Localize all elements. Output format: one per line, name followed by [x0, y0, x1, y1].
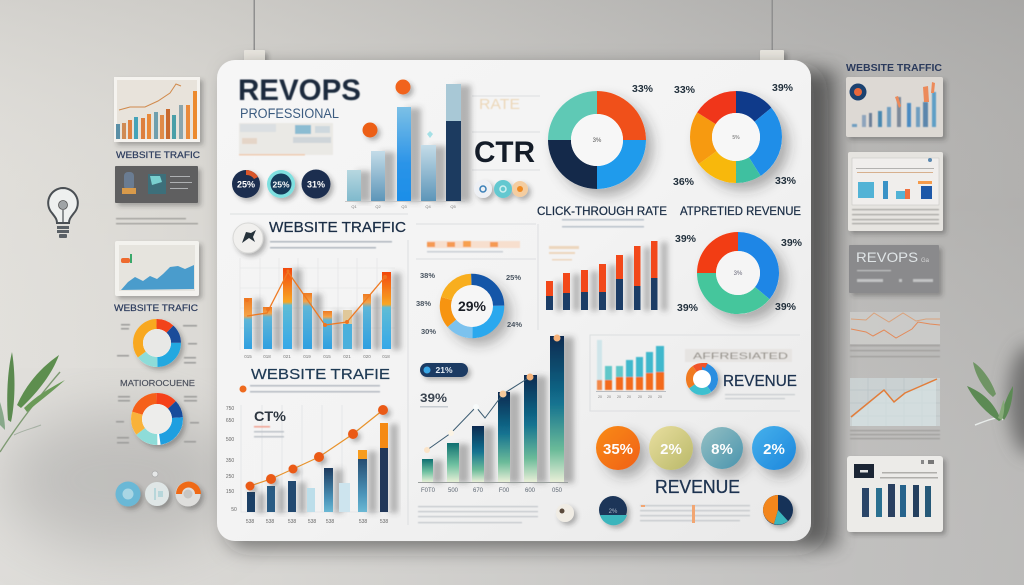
- mini bar chart: box: 20: [627, 395, 631, 399]
- gradient bar chart with trend line: 500: [448, 488, 459, 494]
- label: revenue small: [723, 373, 797, 399]
- panel dividers: [230, 96, 800, 525]
- combo chart: line and bars: 750: [226, 406, 234, 412]
- combo chart: line and bars: 538: [359, 519, 367, 525]
- left caption lines: [116, 218, 198, 224]
- mini bar chart: box: 20: [648, 395, 652, 399]
- combo chart: line and bars: 250: [226, 474, 234, 480]
- mini bar chart: box: 20: [607, 395, 611, 399]
- bar chart: click-through rate: [546, 241, 658, 310]
- pill badge: 21%: 21%: [435, 365, 453, 375]
- bar chart: website traffic: 015: [323, 354, 331, 359]
- percent badges row: 25%: [272, 180, 290, 190]
- percentage circles: [596, 426, 796, 470]
- combo chart: line and bars: [226, 405, 392, 525]
- title: RevOps: REVOPS: [238, 74, 361, 107]
- heading: revenue: REVENUE: [655, 477, 740, 497]
- left label: website traffic 2: WEBSITE TRAFIC: [114, 303, 198, 314]
- left label: website traffic: WEBSITE TRAFIC: [116, 150, 200, 161]
- right card: RevOps grey: Ga: [921, 258, 930, 264]
- gradient bar chart with trend line: 050: [552, 488, 563, 494]
- combo chart: line and bars: 50: [231, 507, 237, 513]
- percent badges row: [232, 170, 330, 198]
- mini bar chart: box: 20: [638, 395, 642, 399]
- left card: bar and line thumbnail: [114, 77, 200, 142]
- label: revenue small: REVENUE: [723, 373, 797, 390]
- thumbnail strip under title: [239, 123, 333, 156]
- gradient bar chart with trend line: 670: [473, 488, 484, 494]
- title block: [238, 74, 361, 121]
- donut percentage labels: 33%: [775, 175, 797, 187]
- combo chart: line and bars: 538: [266, 519, 274, 525]
- donut chart: 29%: 29%: [458, 298, 487, 314]
- left icon buttons row: [116, 471, 201, 506]
- bottom row badges and caption: [556, 495, 793, 525]
- mini bar chart: box: 20: [598, 395, 602, 399]
- gradient bar chart with trend line: F0T0: [421, 488, 436, 494]
- combo chart: line and bars: CT%: [254, 408, 287, 424]
- bar chart: website traffic: 021: [343, 354, 351, 359]
- donut chart: revenue split: [697, 232, 779, 314]
- section heading: website traffic second: [240, 366, 390, 392]
- bar chart: headline bars: Q2: [375, 204, 381, 209]
- label: 39%: 39%: [420, 391, 447, 405]
- left label: revenue: MATIOROCUENE: [120, 378, 195, 388]
- section heading: website traffic: [233, 219, 406, 253]
- icon: cursor badge: [233, 223, 263, 253]
- percentage circles: 2%: [660, 441, 682, 458]
- donut chart: 29%: 30%: [421, 327, 436, 336]
- section heading: website traffic second: WEBSITE TRAFIE: [251, 366, 390, 383]
- gradient bar chart with trend line: [418, 334, 568, 523]
- donut chart: attributed revenue: [690, 91, 782, 183]
- gradient bar chart with trend line: 600: [525, 488, 536, 494]
- combo chart: line and bars: 538: [288, 519, 296, 525]
- left donut: traffic: [117, 319, 197, 367]
- bar chart: website traffic: 018: [382, 354, 390, 359]
- percentage circles: 35%: [603, 441, 633, 458]
- heading: attributed revenue: ATPRETIED REVENUE: [680, 204, 801, 218]
- hanging strings and clips: [244, 0, 784, 61]
- donut chart: 29%: 38%: [420, 271, 435, 280]
- donut percentage labels: 39%: [781, 237, 803, 249]
- combo chart: line and bars: 150: [226, 489, 234, 495]
- combo chart: line and bars: 538: [246, 519, 254, 525]
- combo chart: line and bars: 650: [226, 418, 234, 424]
- bar chart: website traffic: 019: [303, 354, 311, 359]
- donut chart: 29%: 24%: [507, 320, 522, 329]
- right card: growth bars: [846, 77, 943, 137]
- donut chart: 29%: 38%: [416, 299, 431, 308]
- pill badge: 21%: [420, 363, 468, 377]
- bar chart: headline bars: [345, 80, 465, 209]
- donut percentage labels: 39%: [675, 233, 697, 245]
- bar chart: headline bars: Q5: [450, 204, 456, 209]
- mini bar chart: box: [596, 340, 666, 399]
- donut percentage labels: 33%: [632, 83, 654, 95]
- left card: area chart thumbnail: [115, 241, 199, 296]
- right label: website traffic: WEBSITE TRAFFIC: [846, 62, 942, 74]
- small pills under CTR: [474, 180, 528, 198]
- donut percentage labels: [632, 82, 803, 314]
- icon: light bulb: [48, 188, 78, 238]
- heading: click-through rate: CLICK-THROUGH RATE: [537, 204, 667, 218]
- bar chart: website traffic: 018: [263, 354, 271, 359]
- heading and legend: donut 29%: [427, 241, 520, 252]
- bar chart: website traffic: 020: [363, 354, 371, 359]
- subtitle: Professional: PROFESSIONAL: [240, 106, 339, 121]
- combo chart: line and bars: 538: [308, 519, 316, 525]
- revenue card: small heading: [685, 349, 792, 362]
- combo chart: line and bars: 500: [226, 437, 234, 443]
- donut chart: CTR share: 3%: [593, 138, 602, 144]
- bar chart: headline bars: Q3: [401, 204, 407, 209]
- mini donut: [686, 363, 718, 395]
- gradient bar chart with trend line: F00: [499, 488, 510, 494]
- revenue card: small heading: AFFRESIATED: [693, 351, 789, 361]
- bar chart: headline bars: Q4: [425, 204, 431, 209]
- left donut: revenue: [116, 393, 199, 445]
- donut percentage labels: 39%: [775, 301, 797, 313]
- combo chart: line and bars: 538: [380, 519, 388, 525]
- right chart: wave lines: [850, 312, 940, 357]
- rate label: RATE: [479, 96, 520, 113]
- bottom row badges and caption: 2%: [609, 509, 618, 515]
- caption under click-through rate: [562, 219, 644, 228]
- right chart: rising line: [850, 378, 940, 439]
- right card: RevOps grey: REVOPS: [856, 249, 918, 265]
- percent badges row: 31%: [307, 180, 325, 190]
- donut percentage labels: 39%: [772, 82, 794, 94]
- mini bar chart: box: 20: [658, 395, 662, 399]
- donut percentage labels: 36%: [673, 176, 695, 188]
- plant: left: [0, 352, 65, 452]
- donut chart: attributed revenue: 5%: [732, 135, 740, 141]
- section heading: website traffic: WEBSITE TRAFFIC: [269, 219, 406, 236]
- bar chart: website traffic: 021: [283, 354, 291, 359]
- percentage circles: 2%: [763, 441, 785, 458]
- combo chart: line and bars: 538: [326, 519, 334, 525]
- donut chart: CTR share: [548, 91, 646, 189]
- left card: dark slide: [115, 166, 198, 203]
- donut chart: 29%: 25%: [506, 273, 521, 282]
- percent badges row: 25%: [237, 180, 255, 190]
- percentage circles: 8%: [711, 441, 733, 458]
- bar chart: website traffic: [240, 258, 395, 359]
- CTR heading: CTR: [474, 136, 535, 169]
- bar chart: headline bars: Q1: [351, 204, 357, 209]
- mini bar chart: box: 20: [617, 395, 621, 399]
- right card: report preview: [848, 152, 943, 231]
- donut percentage labels: 39%: [677, 302, 699, 314]
- right card: dark header bars: [847, 456, 943, 532]
- right card: RevOps grey: [849, 245, 939, 293]
- main dashboard panel: [217, 60, 811, 541]
- donut percentage labels: 33%: [674, 84, 696, 96]
- donut chart: revenue split: 3%: [734, 271, 743, 277]
- plant: right: [967, 362, 1013, 425]
- combo chart: line and bars: 350: [226, 458, 234, 464]
- donut chart: 29%: [416, 271, 522, 338]
- bar chart: website traffic: 015: [244, 354, 252, 359]
